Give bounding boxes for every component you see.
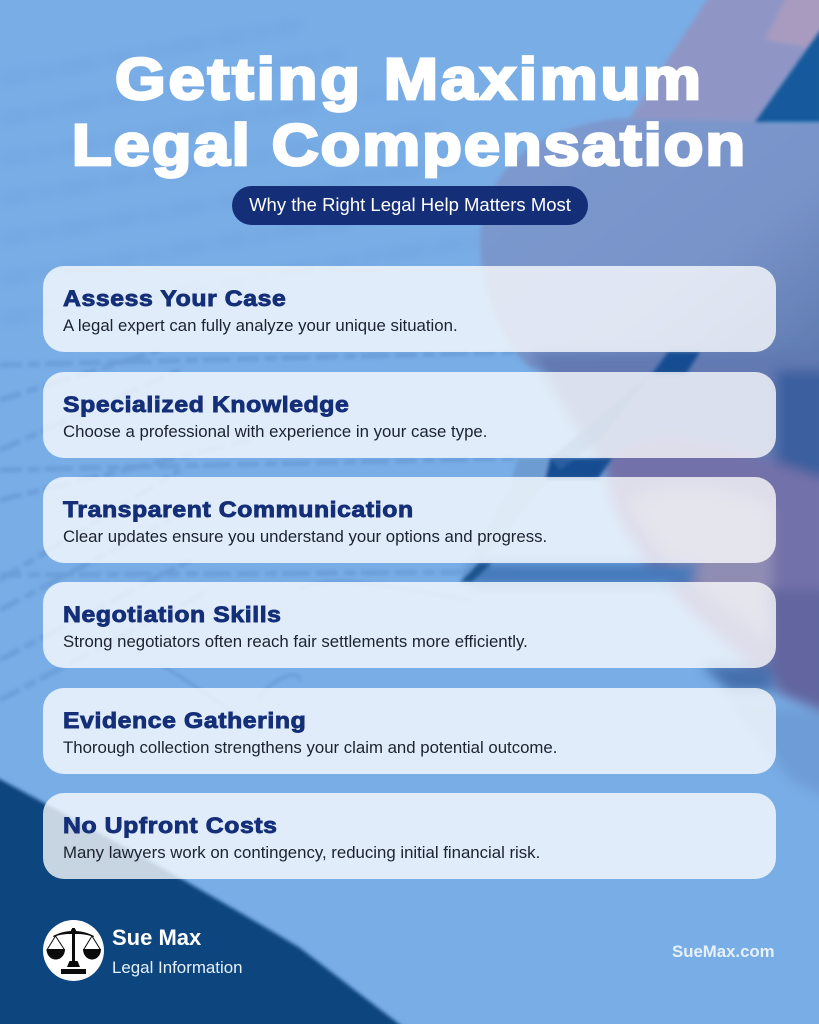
hand and fingers xyxy=(480,0,819,385)
website: SueMax.com xyxy=(672,942,775,960)
card: evidence gathering: Thorough collection strengthens your claim and potential outcome. xyxy=(63,738,557,757)
card: evidence gathering xyxy=(43,688,776,774)
pen segments visible between cards xyxy=(460,352,700,582)
title xyxy=(72,46,747,179)
dark blue pen cap, top corner xyxy=(755,28,819,122)
dark triangle shadow xyxy=(0,774,412,1024)
card: specialized knowledge: Specialized Knowledge xyxy=(63,392,349,416)
card: assess your case: Assess Your Case xyxy=(63,286,286,310)
title: Getting Maximum xyxy=(115,46,704,112)
paper text, blurred xyxy=(0,25,480,320)
card: no upfront costs: No Upfront Costs xyxy=(63,812,278,838)
brand name: Sue Max xyxy=(112,925,201,950)
card: negotiation skills: Strong negotiators often reach fair settlements more efficiently. xyxy=(63,632,528,651)
card: negotiation skills: Negotiation Skills xyxy=(63,602,282,626)
faint pen barrel under cards xyxy=(464,352,668,578)
card: specialized knowledge xyxy=(43,372,776,458)
title: Legal Compensation xyxy=(72,113,747,178)
card: assess your case: A legal expert can fully analyze your unique situation. xyxy=(63,316,458,335)
subtitle pill: Why the Right Legal Help Matters Most xyxy=(249,194,571,215)
card: no upfront costs xyxy=(43,793,776,879)
card: specialized knowledge: Choose a professional with experience in your case type. xyxy=(63,422,487,441)
card: transparent communication: Transparent Communication xyxy=(63,496,414,522)
card: transparent communication: Clear updates ensure you understand your options and progress. xyxy=(63,527,547,546)
signature xyxy=(160,581,470,715)
brand tagline: Legal Information xyxy=(112,958,243,977)
card: transparent communication xyxy=(43,477,776,563)
icon: scales of justice logo xyxy=(43,920,104,981)
card: assess your case xyxy=(43,266,776,352)
card: evidence gathering: Evidence Gathering xyxy=(63,708,306,732)
card: negotiation skills xyxy=(43,582,776,668)
subtitle pill xyxy=(232,186,588,225)
card: no upfront costs: Many lawyers work on contingency, reducing initial financial risk. xyxy=(63,843,540,862)
